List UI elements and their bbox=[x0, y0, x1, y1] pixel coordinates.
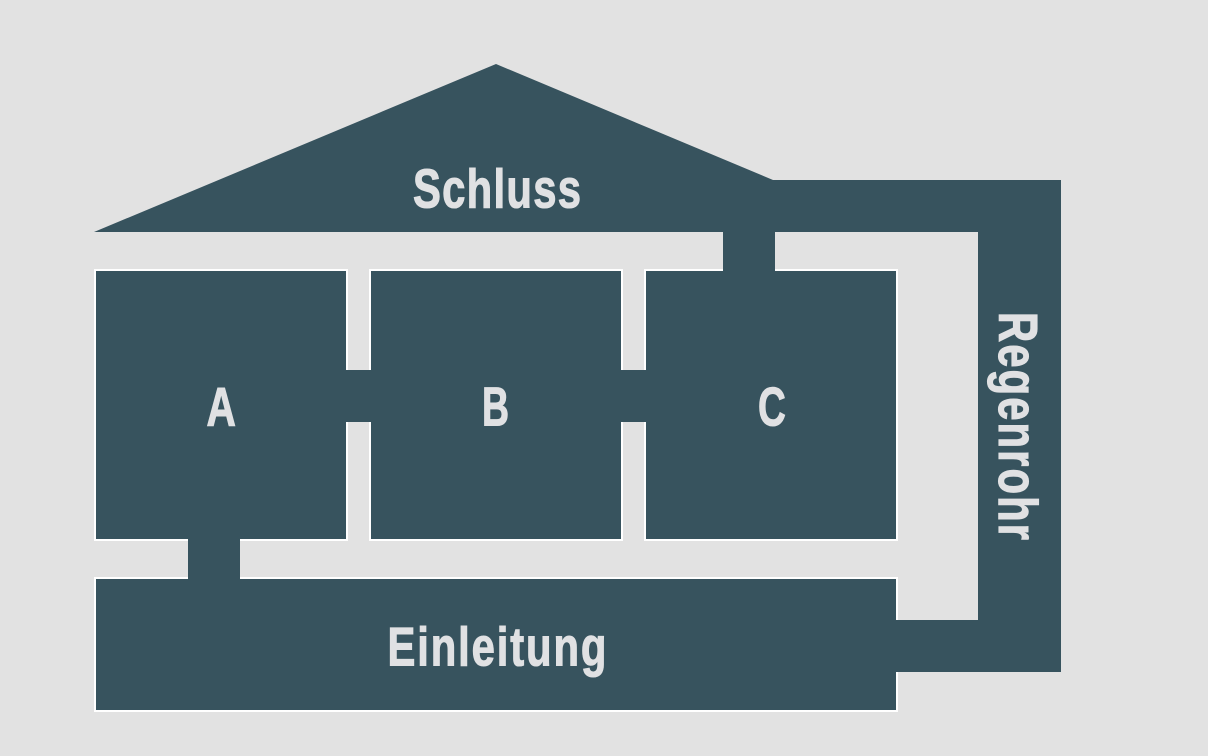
label: A: A bbox=[206, 377, 236, 438]
panel: Einleitung foundation bbox=[95, 578, 897, 711]
connector: A to Einleitung bbox=[188, 538, 240, 580]
connector: B to C bbox=[620, 370, 647, 422]
connector: A to B bbox=[345, 370, 372, 422]
panel: room B bbox=[370, 270, 622, 540]
label: Einleitung: Einleitung bbox=[388, 617, 606, 678]
connector: C to Schluss bbox=[723, 231, 775, 272]
label: Schluss: Schluss bbox=[413, 159, 581, 220]
downpipe: Regenrohr bbox=[772, 180, 1061, 672]
panel: room A bbox=[95, 270, 347, 540]
label: C: C bbox=[758, 377, 786, 438]
label: Regenrohr: Regenrohr bbox=[987, 312, 1047, 540]
panel: room C bbox=[645, 270, 897, 540]
roof: Schluss bbox=[94, 64, 773, 232]
label: B: B bbox=[482, 375, 509, 437]
